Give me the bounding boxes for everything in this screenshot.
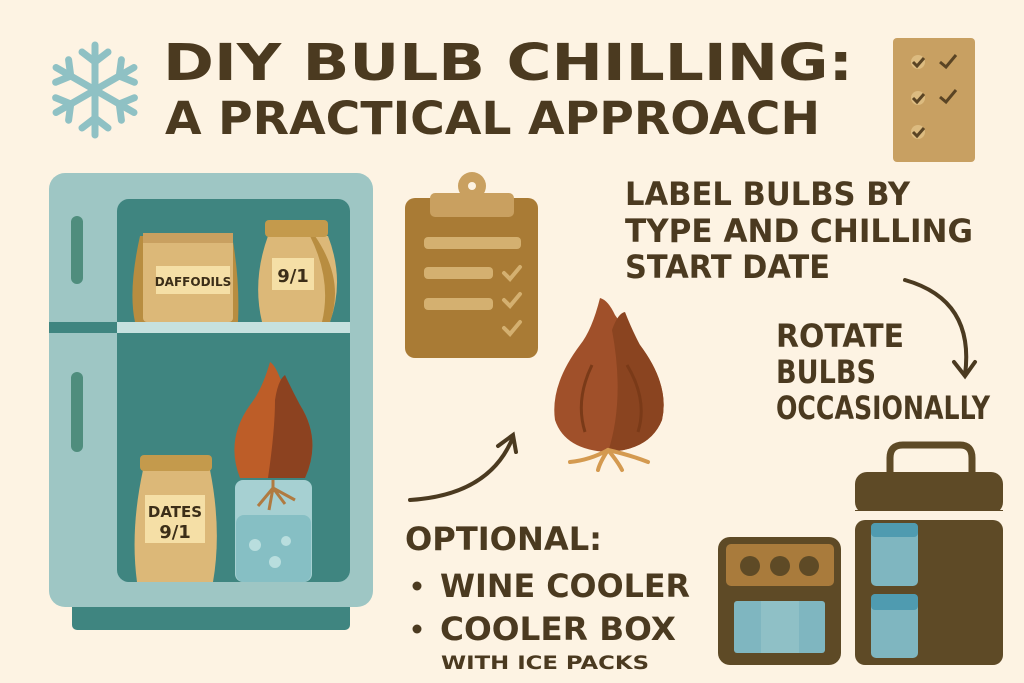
icon: wine cooler bbox=[718, 537, 841, 665]
bag: daffodils bbox=[132, 233, 238, 322]
text: optional list: WITH ICE PACKS bbox=[441, 652, 649, 674]
text: optional list: COOLER BOX bbox=[440, 610, 676, 648]
text: rotate bulbs: BULBS bbox=[776, 353, 876, 391]
text: optional list bbox=[405, 520, 690, 674]
arrow: label to rotate bbox=[905, 280, 975, 376]
text: label bulbs bbox=[625, 175, 973, 286]
title: A PRACTICAL APPROACH bbox=[165, 92, 820, 145]
jar: dates: 9/1 bbox=[159, 522, 191, 543]
bulb in glass of water bbox=[234, 362, 312, 582]
icon: checklist card bbox=[893, 38, 975, 162]
text: optional list: OPTIONAL: bbox=[405, 520, 602, 558]
icon: clipboard bbox=[405, 172, 538, 358]
text: label bulbs: TYPE AND CHILLING bbox=[625, 212, 973, 250]
text: rotate bulbs: ROTATE bbox=[776, 317, 904, 355]
fridge bbox=[49, 173, 373, 630]
bag: daffodils: DAFFODILS bbox=[155, 275, 231, 289]
title: DIY BULB CHILLING: bbox=[163, 34, 853, 93]
icon: cooler box bbox=[855, 445, 1003, 665]
icon: snowflake bbox=[50, 45, 140, 135]
jar: dates: DATES bbox=[148, 503, 202, 521]
icon: bulb bbox=[554, 298, 664, 470]
text: rotate bulbs bbox=[776, 317, 991, 427]
text: optional list: WINE COOLER bbox=[440, 567, 690, 605]
jar: 9/1: 9/1 bbox=[277, 266, 309, 287]
text: label bulbs: LABEL BULBS BY bbox=[625, 175, 911, 213]
jar: dates bbox=[135, 455, 217, 582]
jar: 9/1 bbox=[258, 220, 337, 322]
text: label bulbs: START DATE bbox=[625, 248, 830, 286]
title bbox=[163, 34, 853, 145]
arrow: optional to bulb bbox=[410, 435, 516, 500]
